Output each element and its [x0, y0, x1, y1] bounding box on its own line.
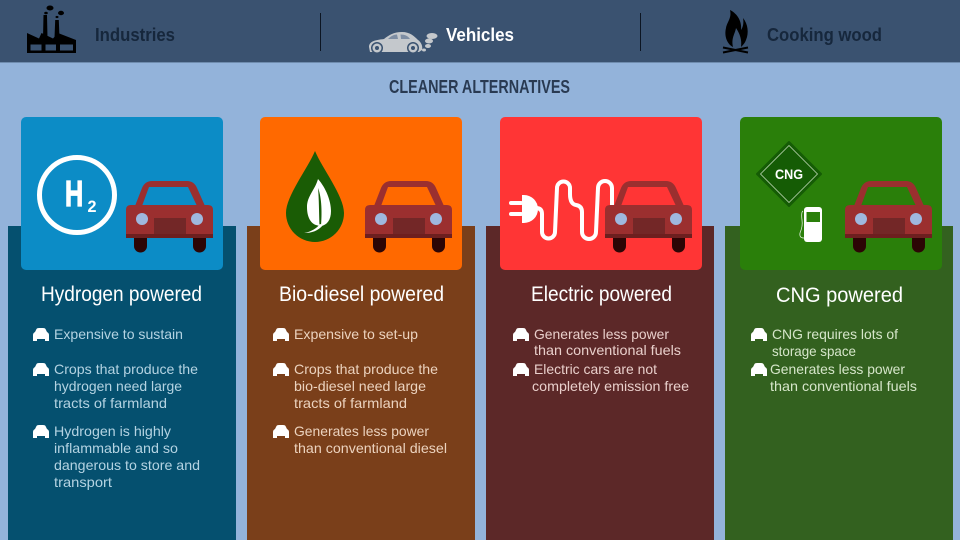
icon: H2 circle: H: [65, 174, 83, 214]
icon: H2 circle: [40, 158, 114, 232]
heading: cleaner alternatives: CLEANER ALTERNATIVES: [389, 77, 570, 97]
icon: leaf drop: [286, 151, 344, 242]
bullet: crops: hydrogen need large: [54, 378, 182, 394]
icon: CNG diamond sign: CNG: [775, 166, 803, 182]
bullet: expensive to sustain: Expensive to sustain: [54, 326, 183, 342]
bullet: generates less power: Generates less power: [534, 326, 669, 342]
bullet: generates less power: Generates less power: [294, 423, 429, 439]
icon: factory: [27, 6, 76, 53]
bullet: generates less power: than conventional fuels: [770, 378, 917, 394]
bullet: storage space: storage space: [772, 343, 856, 359]
icon: CNG diamond sign: [757, 142, 821, 206]
bullet list: CNG: [751, 326, 917, 394]
bullet icon: [33, 328, 49, 341]
icon: red car: [845, 181, 932, 252]
label: industries: Industries: [95, 25, 175, 45]
bullet list: hydrogen: [33, 326, 200, 490]
bullet: crops: Crops that produce the: [54, 361, 198, 377]
bullet icon: [33, 363, 49, 376]
label: cooking wood: Cooking wood: [767, 25, 882, 45]
bullet icon: [33, 425, 49, 438]
card: bio-diesel: [260, 117, 462, 270]
bullet icon: [273, 328, 289, 341]
title: CNG powered: CNG powered: [776, 284, 903, 307]
bullet list: electric: [513, 326, 689, 394]
bullet icon: [273, 425, 289, 438]
bullet: generates less power: [770, 361, 917, 394]
bullet: highly inflammable: [54, 423, 200, 490]
bullet: crops: tracts of farmland: [54, 395, 167, 411]
title: electric powered: Electric powered: [531, 283, 672, 306]
panel: hydrogen powered: [8, 117, 236, 540]
icon: campfire: [723, 10, 748, 52]
bullet: generates less power: than conventional diesel: [294, 440, 447, 456]
bullet: crops: tracts of farmland: [294, 395, 407, 411]
bullet: not emission free: Electric cars are not: [534, 361, 657, 377]
bullet: not emission free: completely emission free: [532, 378, 689, 394]
card: hydrogen: [21, 117, 223, 270]
icon: red car: [365, 181, 452, 252]
bullet: not emission free: [532, 361, 689, 394]
bullet: highly inflammable: inflammable and so: [54, 440, 178, 456]
panel: bio-diesel powered: [247, 117, 475, 540]
icon: fuel pump: [800, 207, 822, 242]
bullet: generates less power: [294, 423, 447, 456]
label: vehicles: Vehicles: [446, 25, 514, 45]
bullet: highly inflammable: dangerous to store and: [54, 457, 200, 473]
bullet list: bio-diesel: [273, 326, 447, 456]
icon: red car: [126, 181, 213, 252]
card: CNG: [740, 117, 942, 270]
title: bio-diesel powered: Bio-diesel powered: [279, 283, 444, 306]
bullet: generates less power: [534, 326, 681, 358]
bullet icon: [751, 328, 767, 341]
bullet: expensive to set-up: Expensive to set-up: [294, 326, 418, 342]
bullet: storage space: CNG requires lots of: [772, 326, 898, 342]
bullet: highly inflammable: Hydrogen is highly: [54, 423, 171, 439]
bullet: highly inflammable: transport: [54, 474, 112, 490]
icon: red car: [605, 181, 692, 252]
bullet: crops: Crops that produce the: [294, 361, 438, 377]
bullet: crops: [54, 361, 198, 411]
panel: CNG powered: [725, 117, 953, 540]
bullet icon: [513, 363, 529, 376]
panel: electric powered: [486, 117, 714, 540]
icon: plug and cord: [509, 181, 612, 239]
bullet: generates less power: Generates less power: [770, 361, 905, 377]
icon: vehicle with exhaust: [369, 32, 438, 54]
bullet icon: [513, 328, 529, 341]
bullet icon: [751, 363, 767, 376]
bullet: crops: bio-diesel need large: [294, 378, 426, 394]
bullet: crops: [294, 361, 438, 411]
card: electric: [500, 117, 702, 270]
bullet: storage space: [772, 326, 898, 359]
bullet: generates less power: than conventional fuels: [534, 342, 681, 358]
icon: H2 circle: 2: [88, 197, 96, 216]
header bar: [0, 0, 960, 63]
bullet icon: [273, 363, 289, 376]
title: hydrogen powered: Hydrogen powered: [41, 283, 202, 306]
